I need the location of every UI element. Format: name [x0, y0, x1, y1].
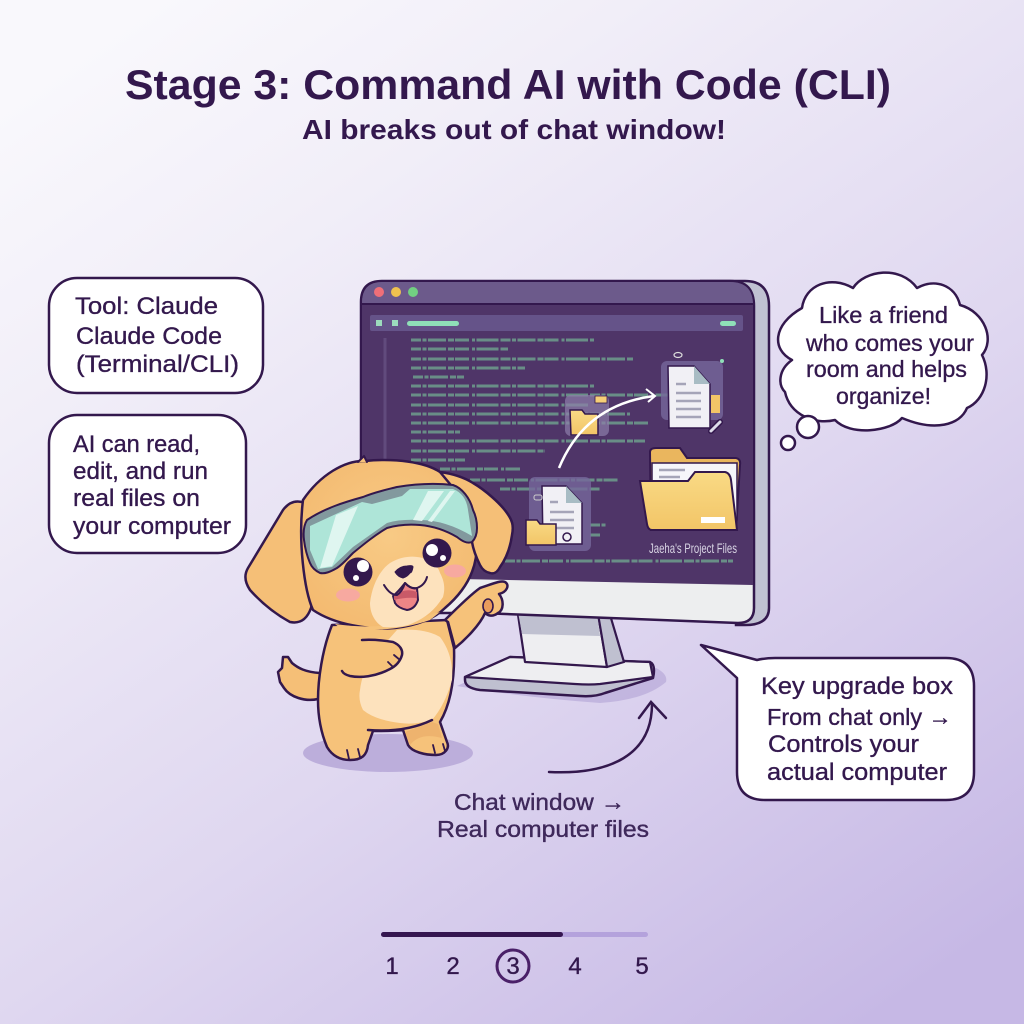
cheeks [336, 588, 360, 602]
head tuft [358, 456, 367, 462]
monitor side shell [700, 281, 769, 625]
toes [347, 744, 445, 759]
progress steps: 2 [446, 953, 460, 980]
thought bubble: Like a friend [819, 302, 948, 328]
monitor base shadow [457, 668, 666, 703]
arrow between files [559, 389, 655, 468]
progress steps: 3 [506, 953, 520, 980]
panel: tool callout [49, 278, 263, 393]
panel: key upgrade callout [701, 645, 974, 800]
title bar [362, 282, 753, 305]
progress steps: 1 [385, 953, 399, 980]
document bottom left [526, 477, 591, 551]
toolbar [370, 315, 743, 331]
panel: key upgrade callout: From chat only → [767, 704, 952, 730]
thought bubble [778, 273, 988, 450]
panel: file access callout: AI can read, [73, 431, 200, 458]
muzzle [370, 557, 444, 627]
monitor body [361, 281, 754, 623]
progress steps [385, 950, 649, 982]
project folder [640, 448, 740, 530]
goggles [304, 484, 477, 573]
screen [362, 282, 753, 585]
caption: Chat window → [454, 789, 625, 815]
document top right [661, 352, 724, 431]
dog mascot [245, 456, 513, 772]
eyes [344, 558, 372, 586]
title: Stage 3: Command AI with Code (CLI) [125, 61, 891, 108]
panel: key upgrade callout: Controls your [768, 731, 919, 758]
caption [437, 789, 649, 842]
chest arm [342, 640, 402, 677]
right foot shade [405, 722, 442, 745]
panel: file access callout: edit, and run [73, 458, 208, 485]
progress steps: 5 [635, 953, 649, 980]
panel: file access callout: your computer [73, 513, 231, 540]
pointing arm [445, 582, 507, 648]
monitor [361, 281, 769, 703]
thought bubble: who comes your [805, 330, 974, 356]
head [301, 460, 477, 628]
nose and smile [395, 566, 413, 578]
left ear [245, 502, 315, 622]
progress steps: 4 [568, 953, 582, 980]
curved arrow to monitor [549, 702, 666, 772]
panel: file access callout [49, 415, 246, 553]
panel: tool callout: Tool: Claude [75, 293, 218, 320]
mouth [393, 583, 418, 610]
caption: Real computer files [437, 816, 649, 842]
monitor base [465, 657, 654, 696]
thought bubble: room and helps [806, 356, 967, 382]
tail [278, 657, 320, 700]
panel: key upgrade callout: actual computer [767, 759, 947, 786]
right ear [440, 472, 513, 573]
folder label: Jaeha's Project Files [649, 540, 737, 556]
monitor stand [517, 608, 607, 667]
chin cover [335, 612, 440, 630]
thought dots [781, 416, 819, 450]
panel: file access callout: real files on [73, 485, 200, 512]
panel: tool callout: (Terminal/CLI) [76, 351, 239, 378]
ground shadow [303, 734, 473, 772]
body bottom line [368, 720, 432, 731]
small folder icon [565, 395, 609, 436]
thought bubble: organize! [836, 383, 931, 409]
panel: key upgrade callout: Key upgrade box [761, 673, 953, 700]
belly [359, 630, 452, 724]
code lines [385, 338, 733, 561]
progress bar [381, 932, 648, 937]
body [318, 620, 454, 760]
subtitle: AI breaks out of chat window! [302, 114, 726, 145]
panel: tool callout: Claude Code [76, 323, 222, 350]
